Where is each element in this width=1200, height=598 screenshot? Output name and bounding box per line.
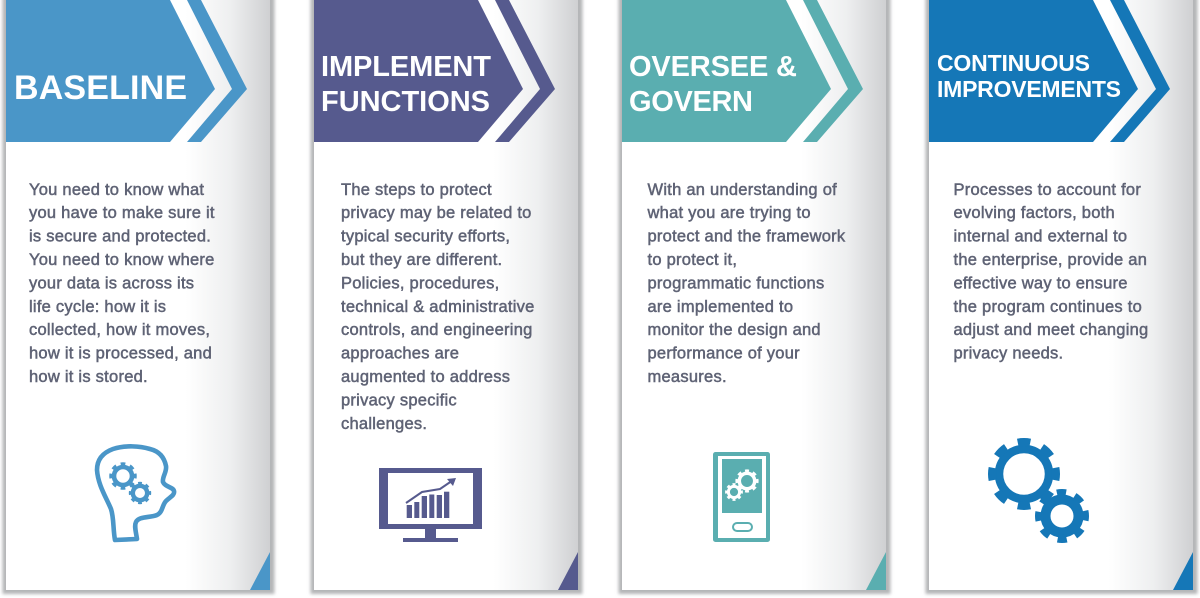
body text: baseline: You need to know what	[29, 181, 204, 199]
body text: implement functions: technical & administrative	[341, 298, 535, 316]
body text: implement functions: Policies, procedures,	[341, 274, 499, 292]
header arrow: implement functions: FUNCTIONS	[321, 86, 490, 118]
header arrow: oversee and govern	[622, 0, 863, 142]
panel: oversee and govern	[618, 0, 890, 594]
header arrow: oversee and govern: GOVERN	[629, 86, 753, 118]
icon: monitor with chart	[379, 468, 482, 542]
corner triangle: oversee and govern	[866, 552, 886, 590]
body text: baseline: you have to make sure it	[29, 204, 215, 222]
body text: continuous improvements: evolving factors, both	[954, 204, 1115, 222]
body text: baseline: You need to know where	[29, 251, 215, 269]
body text: oversee and govern: With an understanding of	[648, 181, 837, 199]
header arrow: continuous improvements	[929, 0, 1170, 142]
body text: continuous improvements: internal and external to	[954, 228, 1127, 246]
body text: baseline: your data is across its	[29, 274, 194, 292]
body text: implement functions: but they are different.	[341, 251, 502, 269]
icon: phone with gears	[713, 452, 770, 542]
icon: head with gears	[97, 446, 174, 540]
body text: implement functions: augmented to address	[341, 368, 510, 386]
header arrow: continuous improvements: IMPROVEMENTS	[937, 76, 1121, 102]
body text: implement functions: controls, and engineering	[341, 321, 533, 339]
body text: continuous improvements: adjust and meet changing	[954, 321, 1148, 339]
panel: continuous improvements	[926, 0, 1198, 594]
header arrow: baseline	[6, 0, 247, 142]
body text: continuous improvements: the enterprise, provide an	[954, 251, 1147, 269]
body text: continuous improvements: effective way to ensure	[954, 274, 1128, 292]
panel: implement functions	[310, 0, 582, 594]
body text: continuous improvements: privacy needs.	[954, 345, 1063, 363]
body text: oversee and govern: measures.	[648, 368, 727, 386]
body text: oversee and govern: performance of your	[648, 345, 800, 363]
header arrow: continuous improvements: CONTINUOUS	[937, 50, 1090, 76]
body text: implement functions: typical security efforts,	[341, 228, 510, 246]
body text: baseline: how it is processed, and	[29, 345, 212, 363]
header arrow: baseline: BASELINE	[14, 69, 187, 107]
corner triangle: baseline	[250, 552, 270, 590]
body text: oversee and govern: what you are trying to	[646, 204, 811, 222]
body text: implement functions: privacy specific	[341, 391, 457, 409]
body text: baseline: how it is stored.	[29, 368, 148, 386]
body text: oversee and govern: are implemented to	[648, 298, 793, 316]
body text: oversee and govern: protect and the framework	[648, 228, 846, 246]
header arrow: oversee and govern: OVERSEE &	[629, 51, 797, 83]
corner triangle: continuous improvements	[1173, 552, 1193, 590]
icon: gears	[992, 442, 1085, 539]
body text: implement functions: challenges.	[341, 415, 427, 433]
header arrow: implement functions: IMPLEMENT	[321, 51, 491, 83]
body text: implement functions: The steps to protect	[341, 181, 492, 199]
body text: oversee and govern: to protect it,	[648, 251, 737, 269]
header arrow: implement functions	[314, 0, 555, 142]
body text: continuous improvements: Processes to account for	[954, 181, 1141, 199]
body text: oversee and govern: programmatic functions	[648, 274, 824, 292]
body text: baseline: collected, how it moves,	[29, 321, 210, 339]
corner triangle: implement functions	[558, 552, 578, 590]
body text: oversee and govern: monitor the design and	[648, 321, 821, 339]
body text: continuous improvements: the program continues to	[954, 298, 1142, 316]
body text: implement functions: privacy may be related to	[341, 204, 532, 222]
body text: implement functions: approaches are	[341, 345, 459, 363]
panel: baseline	[2, 0, 274, 594]
body text: baseline: life cycle: how it is	[29, 298, 166, 316]
body text: baseline: is secure and protected.	[29, 228, 211, 246]
